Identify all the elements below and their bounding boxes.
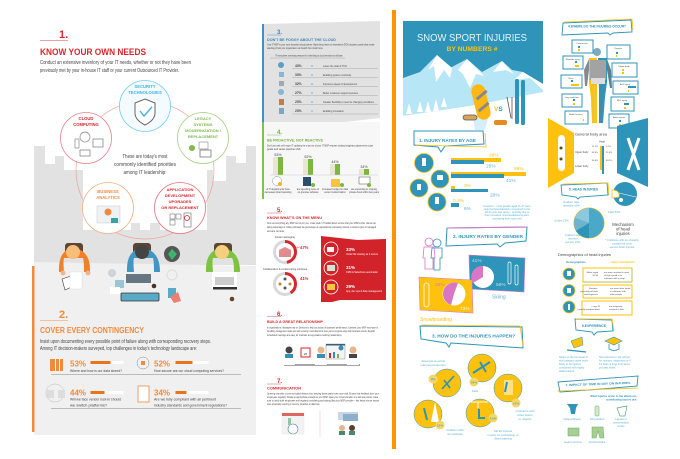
vs: VS (494, 106, 503, 113)
section 1 heading: 1. (59, 29, 68, 41)
circle: cloud computing: COMPUTING (73, 122, 99, 127)
demographics rows: Males aged (587, 272, 599, 274)
stat 34%: Are we fully compliant with all pertinent (154, 396, 217, 402)
heading: impact of time: 7. IMPACT OF TIME IN DAY ON INJURIES (565, 381, 631, 387)
bar chart: proactive: 52% (304, 155, 312, 159)
circle: business analytics: ANALYTICS (96, 195, 120, 200)
section 7 heading: employees regularly. Rotate to appropriate contacts at your MSP. Have your communication in a two-way street, make (267, 395, 378, 399)
chart: general body area: Upper body (575, 150, 589, 154)
injury cause labels: other skiers (517, 413, 533, 417)
pie note: serious brain injuries (610, 245, 635, 249)
factor icons: Fatigue/Illness (563, 417, 581, 421)
body part callouts: Clavicle (614, 48, 623, 50)
cloud reasons list: Lower the total of TCO (323, 65, 347, 68)
injury cause circles: 3-6% (489, 416, 497, 420)
bar chart: proactive: 34% (360, 165, 368, 169)
proactive icons and captions: of IT departments have (266, 188, 291, 191)
section 5 heading: KNOW WHAT'S ON THE MENU (267, 215, 322, 220)
section 6 heading: In organizations, Managers rely on Directors to help out action for optimized performance. Likewise, your MSP may have to (267, 326, 378, 330)
centre text: among IT leadership: (124, 170, 166, 176)
section 4 heading: 4. (277, 130, 282, 136)
section 1 heading: Conduct an extensive inventory of your IT needs, whether or not they have been (40, 60, 191, 66)
injury cause circles: 54% (471, 380, 477, 384)
section 1 heading (40, 29, 191, 74)
icon: skis and poles (507, 79, 525, 125)
pie labels: Falls 54% (608, 210, 621, 214)
demographics rows: are more involved in most (604, 271, 629, 274)
proactive icons and captions: on-premise software (298, 191, 319, 194)
note: age rates: required hospitalization compared to the (484, 207, 531, 211)
age circles (410, 154, 449, 211)
heading: how do injuries happen: 3. HOW DO THE INJURIES HAPPEN? (432, 334, 515, 338)
demographics rows: of high speed or in (604, 274, 623, 277)
afternoon factors text: contributing factors are: (606, 398, 637, 402)
title: BY NUMBERS # (446, 47, 498, 53)
section 6 heading: handling management wide and with existing it and determine how you're progress align with business needs. Regular (267, 329, 375, 333)
heading: injury rates by gender (446, 227, 527, 247)
section 6 heading: 6. (277, 312, 282, 318)
chart: general body area: 40.6% (592, 152, 598, 154)
proactive icons and captions: increased budget for data (322, 188, 349, 191)
circle: application development: OR REPLACEMENT (161, 205, 199, 210)
section 7 heading: Opening channels of communication keeps trust, keeping those gears even more vital. Ensure that feedback from your (267, 392, 379, 396)
stat 44%: we switch platforms? (70, 402, 108, 408)
body part callouts: Wrist (569, 77, 574, 80)
section 2 heading: Among IT decision-makers surveyed, top challenges in today's technology landscape are: (40, 346, 197, 352)
proactive icons and captions (265, 176, 380, 194)
stat 52%: 52% (154, 360, 170, 368)
heading: injury rates by age: 1. INJURY RATES BY AGE (419, 138, 476, 143)
body part callouts (561, 40, 638, 128)
chart: general body area: 21.8% (606, 152, 612, 154)
injury cause circles: 16% (513, 402, 519, 406)
panel: section 3 (264, 21, 380, 122)
heading: demographics: Demographics of head injuries (558, 253, 611, 257)
cloud reasons list: 23% (295, 100, 302, 104)
experience text right (599, 355, 631, 370)
experience text left (559, 355, 588, 373)
bar chart: injury rates by age: 0.3% (453, 198, 465, 204)
demographics rows: are frequently (609, 305, 623, 308)
factor icons: Lapses in (615, 417, 627, 421)
circle: legacy systems: LEGACY (195, 116, 212, 121)
section 5 heading: 5. (277, 208, 282, 214)
section 5 heading: Find out everything any MSP can do for you, under-clad in IT skilled direct service that your MSPs other clients can (267, 221, 376, 225)
section 7 heading: 7. (277, 379, 282, 385)
section 2 heading: Insist upon documenting every possible point of failure along with corresponding recovery steps. (40, 339, 211, 345)
bar chart: injury rates by age: 38% (489, 152, 499, 158)
panel: red stats (321, 236, 386, 302)
pie labels: person 19% (566, 240, 581, 244)
orange panel bar (32, 266, 34, 432)
title (417, 33, 528, 53)
injury cause circles: 15% (437, 424, 443, 428)
factor icons: Heavy lunches (564, 440, 582, 444)
experience text right: Ski instruction / ski school (599, 355, 630, 359)
factor icons: levels (618, 424, 625, 428)
section 1 heading: previously met by your in-house IT staff or your current Outsourced IT Provider. (40, 68, 179, 74)
panel: snowboarding chart (419, 277, 473, 313)
pie chart: mechanism of head injuries (574, 208, 604, 238)
circle: application development: APPLICATION (167, 187, 194, 192)
proactive icons and captions: private cloud within two years (349, 191, 380, 194)
stat 52% (137, 357, 225, 373)
stat 34% (138, 386, 228, 408)
section 3 content: Your IT MSP is your most important cloud partner. Maximizing return on investment (ROI) requires crystal-clear under- (267, 42, 375, 46)
section 5 heading: service remote. (267, 229, 285, 233)
body part callouts: MCL injury (617, 99, 628, 102)
panel: skiing chart (469, 255, 525, 292)
demographics rows: collisions with a jump (604, 277, 625, 280)
panel: light lower background (34, 262, 256, 435)
bar chart: injury rates by age: 3% (464, 183, 472, 189)
heading: head injuries (561, 183, 609, 199)
injury cause circles: 9% (431, 378, 435, 382)
injury cause labels: disembarking (494, 436, 512, 440)
pie labels: Jumps 15% (554, 218, 569, 222)
cloud reasons list: Greater flexibility to react to changing conditions (323, 101, 375, 104)
section 3 content: 3. (277, 30, 282, 36)
pie title (612, 222, 634, 236)
icon: school cap (605, 337, 622, 350)
cloud reasons list: Better customer support services (323, 92, 359, 95)
chart: general body area: 9.1% (606, 146, 611, 148)
cloud reasons list: 43% (295, 64, 302, 68)
circle: application development (154, 182, 206, 234)
icon: couple (423, 238, 442, 270)
proactive icons and captions: are expecting an ongoing (351, 188, 378, 191)
heading: where do injuries occur (562, 19, 633, 35)
title: SNOW SPORT INJURIES (417, 33, 528, 44)
body part callouts: Leg contusion (565, 96, 580, 99)
section 4 heading: goals and asset pipeline shift. (267, 147, 301, 151)
experience text right: it's been a long time since (599, 362, 630, 366)
heading: demographics: Demographics (566, 260, 586, 264)
heading: where do injuries occur: 4.WHERE DO THE INJURIES OCCUR? (568, 24, 626, 28)
cloud reasons list: 32% (295, 82, 302, 86)
heading: head injuries: 5. HEAD INJURIES (569, 188, 599, 192)
body part callouts: Upper body (618, 65, 631, 68)
circle: application development: DEVELOPMENT (165, 193, 196, 198)
stat 53%: Where and how is our data stored? (70, 368, 123, 373)
circle: cloud computing: CLOUD (79, 116, 93, 121)
section 2 heading (40, 309, 211, 352)
circle: application development: UPGRADES (169, 199, 192, 204)
yellow ski shape (548, 118, 574, 188)
chart: general body area: 11.1% (592, 146, 598, 148)
stat 52%: How secure are our cloud computing services? (154, 368, 225, 373)
circle: legacy systems (178, 112, 228, 164)
section 7 heading (267, 379, 380, 406)
pie note: * Collisions with an obstacle (605, 238, 639, 242)
heading: demographics: Injury mechanism (611, 260, 635, 264)
section 2 heading: 2. (59, 309, 68, 321)
bar chart: injury rates by age: 58% (514, 166, 524, 172)
stat 44%: 44% (70, 388, 86, 398)
pie note (605, 238, 639, 249)
pie labels: obstacle 10% (563, 204, 580, 208)
heading: impact of time (557, 376, 638, 392)
factor icons: Alcohol intake (589, 440, 606, 444)
panel: red stats: CRM & Salesforce automation (346, 270, 379, 274)
section 5 heading (267, 208, 376, 233)
cloud reasons list: Improves speed of development (323, 83, 357, 86)
donut: email messaging: Email messaging (275, 235, 295, 239)
section 3 content (267, 30, 375, 58)
icon: experienced skier (567, 337, 586, 352)
icon: gloves (494, 120, 507, 125)
pie labels: another (568, 236, 578, 240)
experience text left: skill category were more (559, 358, 588, 362)
section 3 content: DON'T BE FOGGY ABOUT THE CLOUD (267, 37, 336, 42)
panel: red stats: App, dev ops & data management (346, 289, 382, 293)
bar chart: injury rates by age: 25% (486, 164, 496, 170)
injury cause labels: manoeuvres/jumps (420, 363, 446, 367)
section 3 content: IT executives surveying reasons for intending to cloud services as follows: (275, 54, 343, 58)
demographics rows: (usually snowboarders) (577, 308, 600, 311)
centre text (114, 154, 176, 176)
heading: injury rates by age (414, 131, 486, 152)
pie title: of head (616, 226, 631, 232)
bar chart: proactive (270, 153, 378, 175)
section 6 heading (267, 312, 378, 337)
circle: cloud computing (60, 112, 112, 164)
cloud reasons list: 23% (295, 109, 302, 113)
heading: how do injuries happen (420, 325, 523, 348)
injury cause labels: Collisions with (515, 409, 535, 413)
body part callouts: Concussion (576, 43, 588, 45)
heading: injury rates by gender: 2. INJURY RATES BY GENDER (453, 234, 524, 239)
donut: email messaging: 47% (300, 245, 309, 250)
bar chart: injury rates by age: 6% (464, 206, 472, 212)
icon: helmet (612, 182, 637, 206)
section 1 heading: KNOW YOUR OWN NEEDS (40, 47, 146, 57)
body part callouts: ACL injury (620, 83, 631, 86)
chart: general body area: 49.1% (606, 160, 612, 162)
centre text: commonly identified priorities (114, 162, 176, 168)
cloud reasons list: Enabling innovation (323, 110, 345, 113)
pie labels (554, 200, 621, 244)
demographics rows: Females, (589, 288, 598, 290)
donut: collaboration: Collaboration & conferencing solutions (263, 267, 308, 271)
factor icons (563, 404, 630, 444)
demographics rows: are more often found (610, 287, 631, 290)
pie title: Mechanism (612, 222, 634, 227)
panel: skyline background (34, 146, 256, 265)
body part callouts: Ankle sprain (613, 116, 626, 119)
pie labels: Outdoor rails (563, 200, 580, 204)
heading: experience (575, 319, 614, 335)
experience text left: compared with highly (559, 366, 585, 370)
stat 44% (46, 384, 124, 408)
stat 34%: industry standards and government regulations? (154, 402, 228, 408)
circle: security technologies: TECHNOLOGIES (128, 90, 162, 95)
demographics rows: and beginners (584, 293, 599, 296)
panel: red stats: 31% (346, 265, 355, 270)
stat 44%: Will we face vendor lock-in should (70, 396, 121, 402)
cloud reasons list: Enabling system continuity (323, 74, 352, 77)
donut: email messaging (274, 235, 309, 262)
heading: demographics (558, 253, 635, 264)
section 4 heading: BE PROACTIVE, NOT REACTIVE (267, 138, 323, 142)
body part callouts: Shoulder injury (566, 58, 581, 61)
note: age rates (483, 204, 531, 220)
experience text left: Skiers in the low level of (559, 355, 588, 359)
chart: general body area (575, 132, 612, 174)
chart: general body area: 30.9% (592, 160, 598, 162)
panel: snowboarding chart: 72% (460, 306, 470, 312)
circle: legacy systems: MODERNIZATION / (185, 128, 222, 133)
demographics rows: 18-34 (592, 275, 599, 277)
demographics rows: especially off piste (580, 290, 599, 293)
experience text left: likely to be injured (559, 362, 581, 366)
demographics rows: other people (610, 293, 623, 296)
bar chart: proactive: 53% (274, 153, 282, 157)
chart: general body area: Lower body (575, 164, 589, 168)
centre text: These are today's most (122, 154, 168, 160)
demographics rows (563, 268, 632, 315)
panel: section 4 (264, 122, 380, 199)
panel: red stats: 29% (346, 284, 355, 289)
note: age rates: increasing their injury risk (492, 216, 522, 220)
circle: legacy systems: SYSTEMS (193, 122, 213, 127)
section 7 heading: were potentially resulting in security breaches or data loss. (267, 402, 320, 406)
panel: skiing chart: 58% (496, 282, 506, 288)
chart: general body area: Head (599, 140, 606, 144)
body part callouts: Ankle fracture (569, 113, 584, 116)
cloud reasons list: 27% (295, 91, 302, 95)
icon: snowboard (470, 83, 492, 121)
section 6 heading: BUILD A GREAT RELATIONSHIP (267, 319, 323, 324)
injury cause labels: Ski lift injuries (494, 429, 513, 433)
demographics rows: involved in falls (609, 309, 625, 311)
teal ski shape (617, 118, 648, 187)
note: age rates: their immature musculoskeletal system (485, 213, 529, 217)
factor icons: Dehydration (590, 417, 605, 421)
icon: calendar clock (282, 413, 304, 434)
donut: collaboration (263, 267, 309, 294)
proactive icons and captions: decreased cloud spending (265, 191, 292, 194)
injury cause labels: an obstacle (447, 432, 463, 436)
circle: business analytics: BUSINESS (97, 189, 119, 194)
chart: general body area: General body area (575, 132, 607, 136)
injury cause labels: Attempts at aerial (421, 359, 445, 363)
panel: skiing chart: 41% (472, 258, 482, 264)
priorities ring (76, 101, 214, 239)
section 6 heading: scheduled meetings are easy for maintain a long-relation working relationship. (267, 333, 342, 337)
injury cause labels: Collision with (446, 428, 464, 432)
icon: goggles (463, 115, 477, 120)
bar chart: proactive: 44% (331, 160, 339, 164)
circle: security technologies: SECURITY (134, 84, 156, 89)
bar chart: injury rates by age: 28% (490, 192, 500, 198)
injury cause labels: Falls (472, 389, 479, 393)
skeleton body figure (584, 48, 612, 123)
demographics rows: in collisions with (610, 290, 626, 293)
bar chart: injury rates by age: 41% (506, 178, 516, 184)
circle: legacy systems: REPLACEMENT (188, 134, 219, 139)
note: age rates: 18-34 year age group - possibly due to (485, 210, 530, 214)
injury cause labels (420, 359, 535, 440)
panel: red stats: 33% (346, 247, 355, 252)
orange column divider (392, 10, 396, 449)
panel: red stats: Under file sharing as it occurs (346, 252, 379, 256)
stat 34%: 34% (154, 388, 170, 398)
pie title: injuries (616, 231, 630, 236)
cloud reasons list: 33% (295, 73, 302, 77)
cloud reasons list (278, 62, 378, 114)
circle: security technologies (120, 80, 170, 132)
icon: chat people (338, 412, 358, 435)
experience text left: skilled skiers (559, 369, 575, 373)
section 4 heading (267, 130, 373, 151)
label: snowboarding: Snowboarding (420, 317, 452, 323)
afternoon factors text: What injuries occur in the afternoon, (590, 394, 637, 398)
injury cause labels: mostly on embarking or (487, 433, 519, 437)
section 3 content: standing of how your organization can benefit from cloud focus. (267, 46, 323, 50)
panel: snowboarding chart: 28% (435, 282, 445, 288)
heading: experience: 6.EXPERIENCE (582, 324, 607, 328)
stat 53% (50, 359, 124, 373)
section 7 heading: COMMUNICATION (267, 386, 301, 390)
section 2 heading: COVER EVERY CONTINGENCY (40, 326, 145, 335)
experience text right: you last skied (599, 366, 616, 370)
pie note: caused the most (612, 242, 632, 246)
section 7 heading: sure to notify both employees and regularly completing and asking that your MSP provider – this helps ensure issues (267, 398, 380, 402)
section 4 heading: Don't just wait until major IT updating the most out of your IT MSP requires making budgetary adjustments a part (267, 144, 373, 148)
note: age rates: However – most people aged 11-17 were (483, 204, 531, 208)
label: skiing: Skiing (492, 294, 506, 300)
proactive icons and captions: center modernization (324, 191, 346, 194)
illustration: meeting (283, 344, 360, 365)
experience text right: for novices, beginners or if (599, 358, 631, 362)
afternoon factors text (590, 394, 637, 402)
injury cause circles (414, 354, 522, 430)
section 5 heading: taking advantage of. Hitting indicates the percentage of organizations expressing interest in various types of managed (267, 225, 376, 229)
donut: collaboration: 41% (300, 276, 309, 281)
illustration: meeting: 25 (304, 352, 307, 356)
bar chart: injury rates by age (451, 152, 526, 212)
circle: business analytics (82, 182, 134, 234)
pie labels: Collision with (565, 233, 582, 237)
demographics rows: < age 20 (591, 305, 601, 308)
factor icons: concentration (613, 420, 630, 424)
stat 53%: 53% (70, 360, 86, 368)
proactive icons and captions: are spending more on (297, 188, 320, 191)
injury cause labels: or objects (518, 417, 532, 421)
snow hero panel (403, 21, 543, 140)
illustration: people at desk (59, 243, 240, 303)
